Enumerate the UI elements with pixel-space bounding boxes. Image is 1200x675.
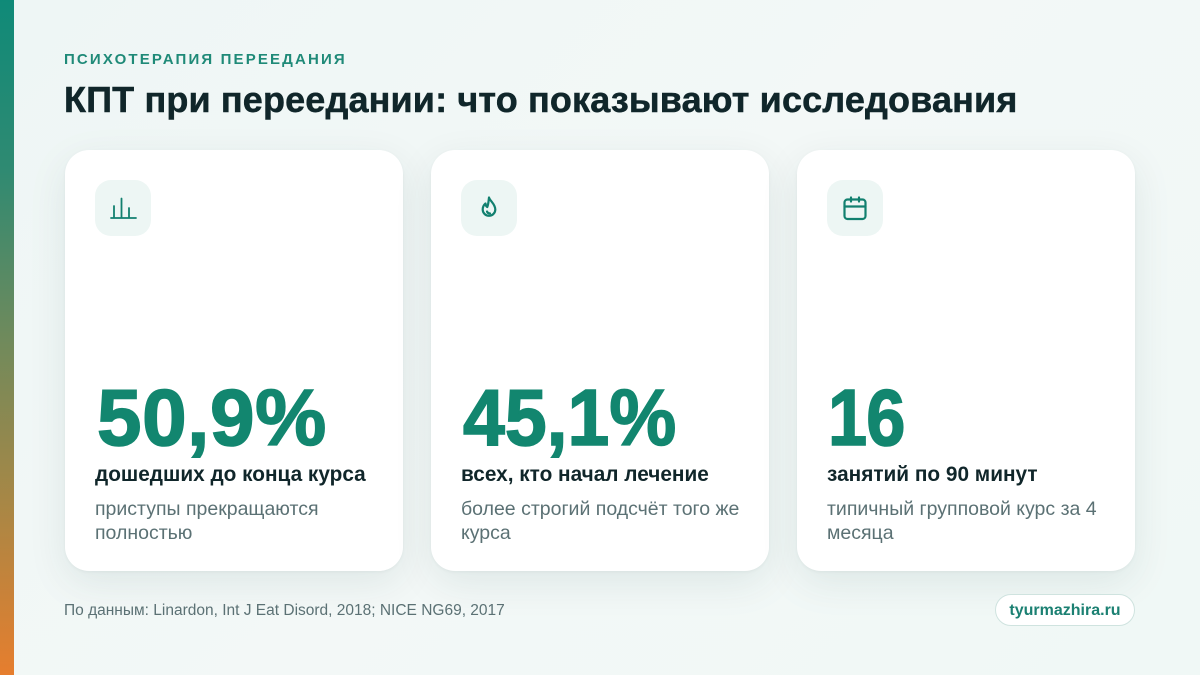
source note: По данным: Linardon, Int J Eat Disord, 2018; NICE NG69, 2017 bbox=[64, 602, 505, 619]
title: КПТ при переедании: что показывают исследования bbox=[64, 79, 1017, 120]
panel: card 1 bbox=[65, 150, 403, 571]
panel: card 2 bbox=[431, 150, 769, 571]
description: приступы прекращаются bbox=[95, 498, 319, 520]
brand pill: tyurmazhira.ru bbox=[1009, 602, 1121, 619]
description bbox=[827, 498, 1097, 544]
stat: 45,1%: 45,1% bbox=[463, 373, 676, 462]
description bbox=[461, 498, 739, 544]
icon: flame bbox=[461, 180, 517, 236]
description: полностью bbox=[95, 522, 192, 544]
left accent stripe bbox=[0, 0, 14, 675]
description: курса bbox=[461, 522, 511, 544]
eyebrow label: ПСИХОТЕРАПИЯ ПЕРЕЕДАНИЯ bbox=[64, 51, 347, 68]
brand pill bbox=[995, 594, 1135, 626]
description: типичный групповой курс за 4 bbox=[827, 498, 1097, 520]
stat: 16: 16 bbox=[828, 373, 905, 462]
description: более строгий подсчёт того же bbox=[461, 498, 739, 520]
icon: bar chart bbox=[95, 180, 151, 236]
stat label: занятий по 90 минут bbox=[827, 463, 1038, 486]
icon: calendar bbox=[827, 180, 883, 236]
description bbox=[95, 498, 319, 544]
stat: 50,9%: 50,9% bbox=[97, 373, 327, 462]
description: месяца bbox=[827, 522, 894, 544]
panel: card 3 bbox=[797, 150, 1135, 571]
stat label: всех, кто начал лечение bbox=[461, 463, 709, 486]
stat label: дошедших до конца курса bbox=[95, 463, 366, 486]
